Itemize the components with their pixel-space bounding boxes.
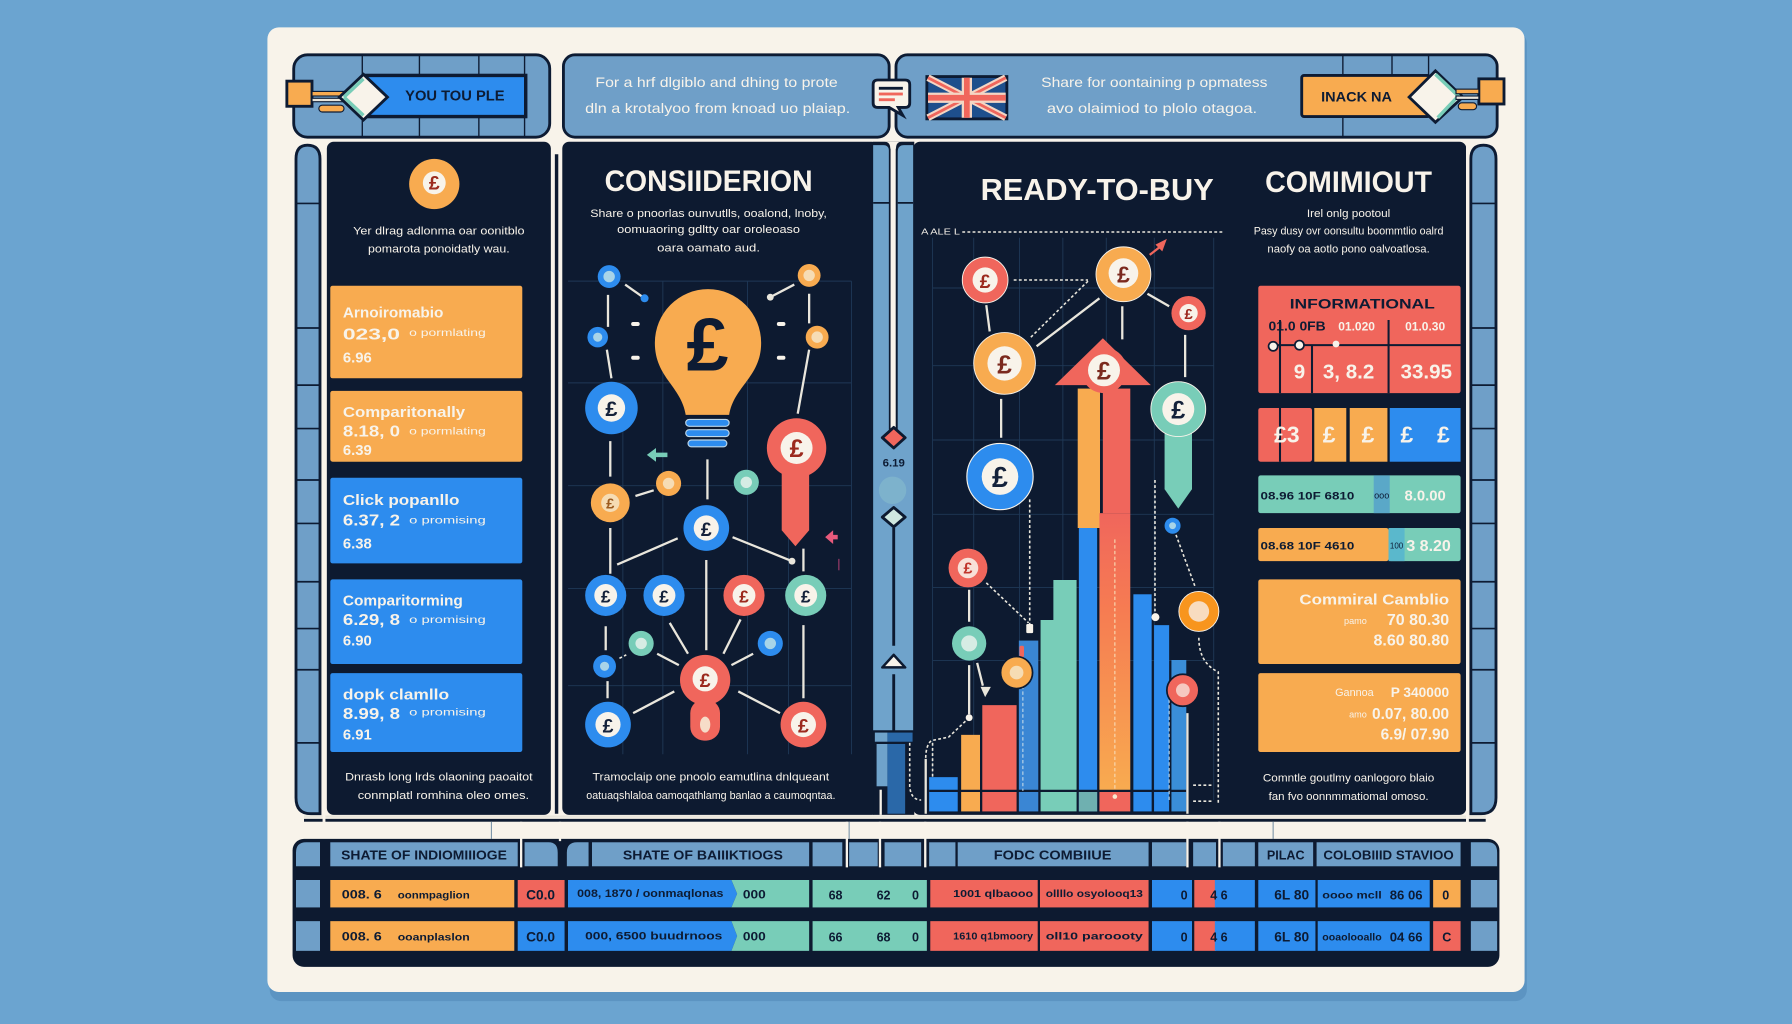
label tag: you tou ple: YOU TOU PLE <box>405 89 505 105</box>
icon: teal diamond marker <box>882 507 905 527</box>
card: comparitonally <box>330 391 522 462</box>
heading: commitment: COMIMIOUT <box>1265 166 1432 199</box>
node: red arrow head: £ <box>1097 357 1111 385</box>
node: blue pound <box>585 382 638 434</box>
awareness intro text: Yer dlrag adlonma oar oonitblo <box>353 225 525 237</box>
consideration footer text <box>586 772 835 802</box>
table row one: 62 <box>877 888 891 902</box>
node: small blue dot <box>1165 518 1181 534</box>
block: informational: 01.020 <box>1338 319 1375 333</box>
top banner left <box>287 55 550 137</box>
icon: awareness coin <box>409 159 459 209</box>
block: commercial card two: Gannoa <box>1335 687 1375 699</box>
chart axis label: A ALE L <box>921 226 960 236</box>
node: red pin <box>767 418 826 546</box>
node: teal row four <box>785 575 826 616</box>
node: orange chart <box>1001 657 1033 689</box>
table row one: 008. 6 <box>342 887 382 901</box>
bar chart <box>929 338 1186 811</box>
card: comparitorming: Comparitorming <box>343 594 463 610</box>
block: commercial card two: amo <box>1349 710 1367 720</box>
node: red hub: £ <box>700 670 711 692</box>
table header row: SHATE OF INDIOMIIIOGE <box>341 848 507 862</box>
banner text right line two: avo olaimiod to plolo otagoa. <box>1047 101 1257 117</box>
block: teal stat bar: 08.96 10F 6810 <box>1261 490 1354 502</box>
label tag: inack na: INACK NA <box>1321 90 1392 106</box>
side rail right <box>1471 145 1496 814</box>
card: dopk clamllo <box>330 673 522 752</box>
commitment footer text: Comntle goutlmy oanlogoro blaio <box>1263 773 1434 785</box>
consideration intro text: oomuaoring gdltty oar oroleoaso <box>617 224 800 236</box>
card: click popanllo: o promising <box>409 515 486 526</box>
block: pound tiles: £ <box>1437 421 1450 447</box>
icon: right diamond <box>1409 71 1463 122</box>
node: blue centre <box>683 505 729 551</box>
block: pound tiles: £ <box>1400 421 1413 447</box>
commitment intro text <box>1254 208 1443 256</box>
node: small orange three <box>656 471 681 496</box>
node: blue row one <box>585 575 626 616</box>
table header row: FODC COMBIIUE <box>994 848 1111 862</box>
awareness intro text <box>353 225 525 256</box>
table row two: 04 66 <box>1390 930 1423 945</box>
node: teal lower <box>952 626 986 661</box>
card: dopk clamllo: dopk clamllo <box>343 687 449 703</box>
table row two: C0.0 <box>526 930 555 945</box>
table row one: 6L 80 <box>1274 887 1309 902</box>
card background <box>267 27 1527 1001</box>
block: orange teal stat bar <box>1258 528 1461 561</box>
banner text left: For a hrf dlgiblo and dhing to prote <box>595 75 838 91</box>
side rail left <box>296 145 320 814</box>
card: comparitonally: 6.39 <box>343 443 372 459</box>
awareness intro text: pomarota ponoidatly wau. <box>368 244 510 256</box>
top banner middle <box>563 55 889 137</box>
table row two: 6L 80 <box>1274 930 1309 945</box>
commitment intro text: Pasy dusy ovr oonsultu boommtlio oalrd <box>1254 225 1443 237</box>
icon: right connector <box>1456 79 1504 110</box>
block: pound tiles: £3 <box>1274 421 1300 447</box>
node: red arrow head <box>1081 347 1127 393</box>
table row one: 6 <box>1221 888 1228 902</box>
block: informational <box>1258 286 1461 393</box>
block: teal stat bar: 8.0.00 <box>1405 489 1446 505</box>
table row two <box>296 921 1497 951</box>
block: commercial card one: Commiral Camblio <box>1299 593 1449 609</box>
table row two: 68 <box>877 931 891 945</box>
node: blue row two <box>643 575 685 616</box>
block: commercial card two: 6.9/ 07.90 <box>1381 726 1449 743</box>
chart links <box>910 239 1218 814</box>
node: blue bottom: £ <box>603 716 614 738</box>
table row one: 0 <box>912 888 919 902</box>
card: click popanllo: 6.38 <box>343 537 372 553</box>
card: comparitonally: Comparitonally <box>343 405 466 421</box>
table row two: ooanplaslon <box>398 933 470 944</box>
commitment intro text: Irel onlg pootoul <box>1307 208 1390 220</box>
block: informational: 3, 8.2 <box>1323 360 1374 383</box>
node: red top <box>962 257 1008 303</box>
node: blue large <box>967 443 1033 510</box>
block: informational: 9 <box>1294 360 1305 383</box>
table row two: 000 <box>743 930 766 944</box>
card: comparitonally: o pormlating <box>409 426 486 437</box>
card: comparitorming: o promising <box>409 615 486 626</box>
table row one: 0 <box>1442 888 1449 902</box>
table header row: PILAC <box>1267 848 1305 862</box>
table row two: 008. 6 <box>342 930 382 944</box>
banner text right: Share for oontaining p opmatess <box>1041 75 1267 91</box>
block: commercial card two <box>1258 673 1461 752</box>
table row two: oll10 paroooty <box>1046 931 1143 942</box>
icon: lightbulb <box>633 289 783 447</box>
heading: consideration: CONSIIDERION <box>605 165 813 198</box>
node: red lower <box>949 549 987 587</box>
consideration intro text: Share o pnoorlas ounvutlls, ooalond, lnoby, <box>590 208 827 220</box>
icon: pink arrow <box>825 530 839 570</box>
consideration footer text: Tramoclaip one pnoolo eamutlina dnlqueant <box>593 772 830 784</box>
table header row: COLOBIIID STAVIOO <box>1323 848 1454 862</box>
block: informational: 01.0.30 <box>1405 319 1445 333</box>
table row one: 1001 qlbaooo <box>953 889 1033 900</box>
block: teal stat bar <box>1258 475 1461 513</box>
node: blue pound: £ <box>605 396 617 421</box>
node: blue bottom <box>585 702 631 747</box>
node: red small: £ <box>1184 307 1193 323</box>
node: small teal <box>734 470 759 495</box>
block: commercial card one <box>1258 579 1461 664</box>
node: small orange two <box>806 326 829 349</box>
table row one: ollllo osyolooq13 <box>1046 889 1143 900</box>
banner text left line two: dln a krotalyoo from knoad uo plaiap. <box>585 101 850 117</box>
node: orange large: £ <box>997 350 1012 380</box>
arrow: big arrowhead <box>1055 338 1151 385</box>
scale value: 6.19 <box>883 457 905 469</box>
node: orange pound: £ <box>606 497 615 513</box>
block: orange teal stat bar: 100 <box>1390 542 1404 551</box>
table row one: 0 <box>1181 888 1188 902</box>
top banner right <box>896 55 1504 137</box>
table row one: C0.0 <box>526 887 555 902</box>
icon: red diamond marker <box>882 427 905 448</box>
card: click popanllo: 6.37, 2 <box>343 513 400 530</box>
card: arnoiromabio: Arnoiromabio <box>343 306 443 322</box>
icon: left connector <box>287 81 344 112</box>
node: red row three <box>723 575 765 616</box>
label tag: inack na <box>1302 75 1430 117</box>
node: small teal two <box>629 631 654 656</box>
icon: union flag <box>927 77 1007 119</box>
card: dopk clamllo: 8.99, 8 <box>343 706 400 723</box>
consideration intro text <box>590 208 827 254</box>
table row one: 008, 1870 / oonmaqlonas <box>577 888 723 900</box>
table row one: 000 <box>743 887 766 901</box>
node: orange large <box>974 333 1035 394</box>
card: arnoiromabio: 023,0 <box>343 326 400 343</box>
node: small orange <box>798 264 821 287</box>
node: small blue <box>598 265 621 288</box>
table row one: 86 06 <box>1390 887 1423 902</box>
card: dopk clamllo: o promising <box>409 707 486 718</box>
card: click popanllo: Click popanllo <box>343 493 459 509</box>
block: pound tiles <box>1258 408 1461 462</box>
panel: awareness <box>327 142 551 815</box>
block: commercial card two: P 340000 <box>1391 685 1450 700</box>
table row two: 000, 6500 buudrnoos <box>585 930 722 942</box>
panel: consideration <box>562 142 879 815</box>
node: orange pound <box>591 483 630 522</box>
icon: awareness coin: £ <box>429 173 440 195</box>
card: comparitorming <box>330 579 522 664</box>
block: commercial card one: pamo <box>1344 616 1367 626</box>
card: comparitorming: 6.29, 8 <box>343 612 400 629</box>
node: small blue four <box>758 631 783 656</box>
table row two: 6 <box>1221 931 1228 945</box>
heading: ready to buy: READY-TO-BUY <box>981 172 1214 207</box>
table header row: SHATE OF BAIIIKTIOGS <box>623 848 783 862</box>
node: red row three: £ <box>739 586 749 606</box>
node: red chart <box>1167 674 1199 706</box>
table row two: 4 <box>1210 931 1217 945</box>
table header row <box>296 822 1497 867</box>
commitment intro text: naofy oa aotlo pono oalvoatlosa. <box>1267 244 1430 256</box>
card: comparitorming: 6.90 <box>343 634 372 650</box>
icon: teal arrow <box>647 448 667 462</box>
node: red pin: £ <box>790 435 804 463</box>
icon: triangle marker <box>882 655 905 667</box>
icon: lightbulb: £ <box>686 302 728 386</box>
block: teal stat bar: ooo <box>1374 490 1389 500</box>
node: blue row two: £ <box>659 586 669 606</box>
node: teal pin <box>1151 382 1206 509</box>
node: red hub <box>680 655 730 741</box>
node: orange top: £ <box>1117 261 1130 287</box>
block: commercial card one: 70 80.30 <box>1387 612 1449 629</box>
node: teal row four: £ <box>801 586 811 606</box>
label tag: you tou ple <box>366 75 526 117</box>
block: pound tiles: £ <box>1362 421 1375 447</box>
awareness footer text <box>345 772 533 802</box>
card: click popanllo <box>330 478 522 563</box>
commitment footer text <box>1263 773 1434 803</box>
centre scale strip <box>873 142 913 815</box>
icon: chat bubble <box>873 80 910 115</box>
consideration footer text: oatuaqshlaloa oamoqathlamg banlao a caumoqntaa. <box>586 790 835 802</box>
block: orange teal stat bar: 08.68 10F 4610 <box>1261 541 1354 553</box>
awareness footer text: conmplatl romhina oleo omes. <box>358 790 529 802</box>
icon: left diamond <box>339 74 387 120</box>
table row two: 66 <box>829 931 843 945</box>
scale circle <box>879 477 906 504</box>
card: arnoiromabio: 6.96 <box>343 350 372 366</box>
block: orange teal stat bar: 3 8.20 <box>1406 538 1451 555</box>
node: blue centre: £ <box>701 519 712 541</box>
table row one: 4 <box>1210 888 1217 902</box>
node: small blue three <box>593 655 616 678</box>
node: red lower: £ <box>964 561 973 578</box>
node: blue large: £ <box>992 462 1008 494</box>
table row two: ooaolooallo <box>1322 933 1382 944</box>
node: orange top <box>1096 247 1151 302</box>
card: arnoiromabio: o pormlating <box>409 328 486 339</box>
commitment footer text: fan fvo oonnmmatiomal omoso. <box>1269 791 1429 803</box>
table row one: oooo mcll <box>1322 890 1382 901</box>
block: pound tiles: £ <box>1323 421 1336 447</box>
node: small blue two <box>587 327 608 347</box>
block: informational: 01.0 0FB <box>1269 319 1326 333</box>
node: blue row one: £ <box>601 586 611 606</box>
scale base <box>875 733 913 815</box>
divider rules <box>304 142 1486 967</box>
block: informational: 33.95 <box>1401 360 1452 383</box>
block: commercial card two: 0.07, 80.00 <box>1372 706 1449 723</box>
node: teal pin: £ <box>1171 396 1185 424</box>
awareness footer text: Dnrasb long lrds olaoning paoaitot <box>345 772 533 784</box>
node: red bottom <box>781 702 826 747</box>
table row two: 0 <box>912 931 919 945</box>
node: red small <box>1171 296 1206 330</box>
node: orange lower <box>1179 591 1219 631</box>
table row two: 1610 q1bmoory <box>953 931 1033 942</box>
block: commercial card one: 8.60 80.80 <box>1374 633 1449 650</box>
panel: ready-to-buy and commitment <box>873 142 1466 815</box>
table row one: 68 <box>829 888 843 902</box>
node: red bottom: £ <box>798 716 809 738</box>
table row two: C <box>1442 931 1451 945</box>
consideration intro text: oara oamato aud. <box>657 242 760 254</box>
card: comparitonally: 8.18, 0 <box>343 424 400 441</box>
card: dopk clamllo: 6.91 <box>343 727 372 743</box>
table row one <box>296 880 1497 907</box>
card: arnoiromabio <box>330 286 522 378</box>
block: informational: INFORMATIONAL <box>1290 297 1435 313</box>
table row two: 0 <box>1181 931 1188 945</box>
network links <box>606 285 809 713</box>
bottom table <box>293 822 1499 967</box>
table row one: oonmpaglion <box>398 890 470 901</box>
node: red top: £ <box>980 271 991 293</box>
